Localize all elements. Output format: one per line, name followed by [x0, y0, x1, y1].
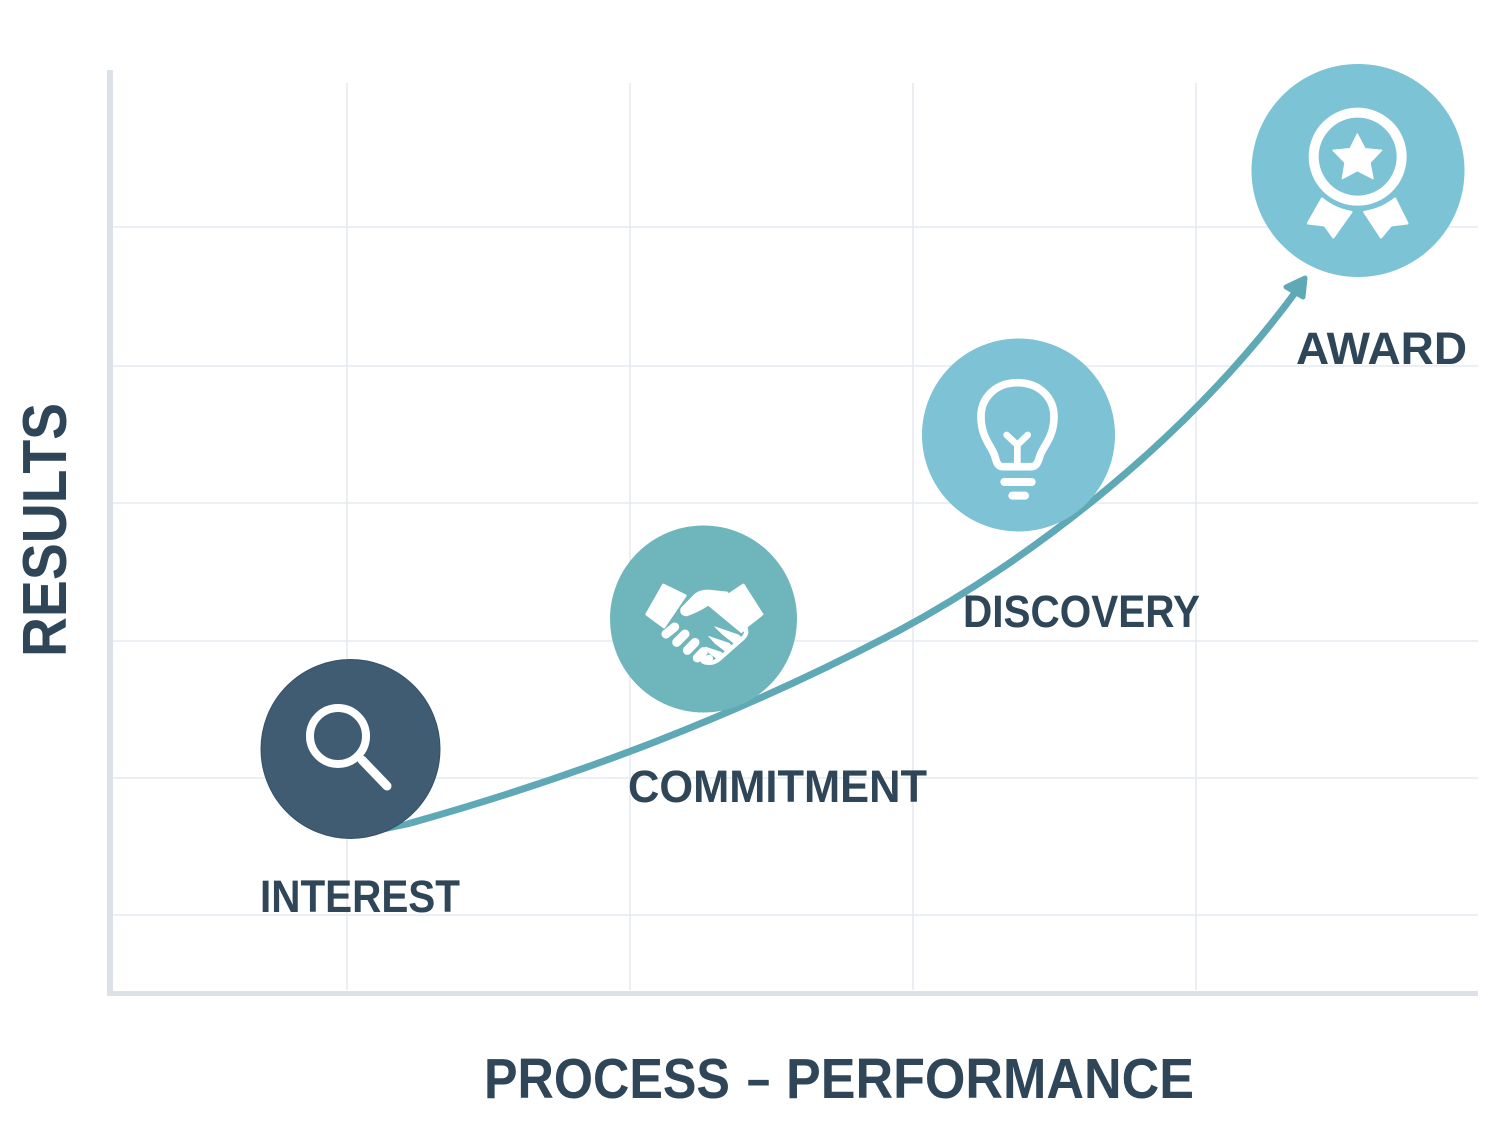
x axis title: [484, 1047, 1194, 1111]
icon: handshake: [647, 585, 762, 663]
icon: award medal: [1308, 113, 1407, 237]
step 1: interest: [260, 660, 460, 922]
icon: magnifying glass: [310, 708, 387, 786]
label: interest: INTEREST: [260, 871, 460, 922]
label: discovery: DISCOVERY: [963, 586, 1200, 637]
y axis title: RESULTS: [11, 403, 80, 657]
label: award: AWARD: [1296, 323, 1467, 374]
label: commitment: COMMITMENT: [628, 761, 927, 812]
x axis title: –: [747, 1047, 770, 1111]
circle: commitment: [610, 526, 797, 712]
x axis title: PROCESS: [484, 1047, 730, 1111]
step 4: award: [1252, 64, 1467, 374]
circle: award: [1252, 64, 1464, 277]
growth arrow: [355, 278, 1305, 838]
step 3: discovery: [922, 338, 1200, 637]
circle: discovery: [922, 338, 1115, 532]
x axis line: [107, 991, 1478, 996]
step 2: commitment: [610, 526, 927, 812]
x axis title: PERFORMANCE: [786, 1047, 1194, 1111]
icon: light bulb: [981, 383, 1054, 496]
circle: interest: [261, 660, 440, 838]
y axis line: [107, 70, 113, 996]
